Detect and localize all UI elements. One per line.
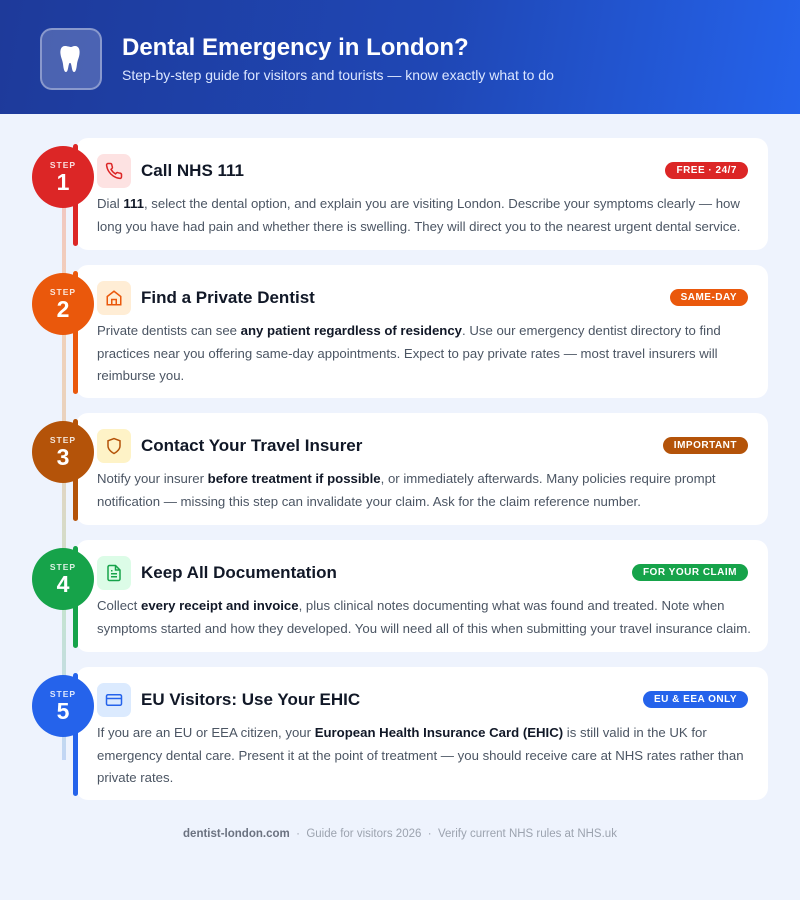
text: [97, 598, 751, 636]
text: [97, 196, 740, 234]
panel: step 4: [76, 540, 768, 652]
heading: Keep All Documentation: [141, 563, 337, 582]
text: practices near you offering same-day appointments. Expect to pay private rates — most travel insurers will: [97, 346, 718, 360]
text: private rates.: [97, 770, 173, 785]
icon: document: [97, 556, 131, 590]
step circle 3: 3: [57, 444, 69, 470]
badge: [670, 289, 748, 306]
badge: [663, 437, 748, 454]
step circle 1: [32, 146, 94, 208]
step circle 3: [32, 421, 94, 483]
step circle 5: [32, 675, 94, 737]
heading: EU Visitors: Use Your EHIC: [141, 690, 360, 709]
step circle 1: 1: [57, 169, 69, 195]
text: Collect every receipt and invoice, plus clinical notes documenting what was found and treated. Note when: [97, 598, 724, 613]
heading: Find a Private Dentist: [141, 288, 315, 307]
title: Dental Emergency in London?: [122, 34, 469, 61]
text: If you are an EU or EEA citizen, your European Health Insurance Card (EHIC) is still valid in the UK for: [97, 725, 707, 740]
badge: SAME-DAY: [681, 292, 737, 303]
text: Private dentists can see any patient regardless of residency. Use our emergency dentist directory to find: [97, 323, 721, 338]
icon: tooth: [40, 28, 102, 90]
step circle 2: STEP: [50, 287, 76, 297]
footer: dentist-london.com · Guide for visitors 2026 · Verify current NHS rules at NHS.uk: [183, 828, 617, 840]
text: symptoms started and how they developed. You will need all of this when submitting your travel insurance claim.: [97, 620, 751, 636]
panel: step 3: [76, 413, 768, 525]
text: [97, 323, 721, 383]
badge: [665, 162, 748, 179]
text: long you have had pain and whether there is swelling. They will direct you to the nearest urgent dental service.: [97, 218, 740, 234]
text: notification — missing this step can invalidate your claim. Ask for the claim reference number.: [97, 494, 641, 508]
panel: step 2: [76, 265, 768, 398]
text: emergency dental care. Present it at the point of treatment — you should receive care at NHS rates rather than: [97, 748, 744, 762]
badge: EU & EEA ONLY: [654, 694, 737, 705]
step circle 3: STEP: [50, 435, 76, 445]
badge: IMPORTANT: [674, 440, 737, 451]
step circle 2: 2: [57, 296, 69, 322]
step circle 2: [32, 273, 94, 335]
text: Notify your insurer before treatment if possible, or immediately afterwards. Many policies require prompt: [97, 471, 716, 486]
text: reimburse you.: [97, 368, 184, 383]
header: [0, 0, 800, 114]
text: Dial 111, select the dental option, and explain you are visiting London. Describe your symptoms clearly — how: [97, 196, 740, 211]
panel: step 5: [76, 667, 768, 800]
step circle 4: [32, 548, 94, 610]
heading: Call NHS 111: [141, 161, 244, 180]
badge: [643, 691, 748, 708]
icon: card: [97, 683, 131, 717]
text: [97, 471, 716, 508]
icon: house: [97, 281, 131, 315]
step circle 4: 4: [57, 571, 69, 597]
text: [97, 725, 744, 785]
step circle 4: STEP: [50, 562, 76, 572]
badge: FOR YOUR CLAIM: [643, 567, 737, 578]
badge: FREE · 24/7: [676, 165, 737, 176]
subtitle: Step-by-step guide for visitors and tourists — know exactly what to do: [122, 67, 554, 83]
step circle 5: STEP: [50, 689, 76, 699]
step circle 5: 5: [57, 698, 69, 724]
panel: step 1: [76, 138, 768, 250]
heading: Contact Your Travel Insurer: [141, 436, 362, 455]
badge: [632, 564, 748, 581]
icon: shield: [97, 429, 131, 463]
icon: phone: [97, 154, 131, 188]
step circle 1: STEP: [50, 160, 76, 170]
